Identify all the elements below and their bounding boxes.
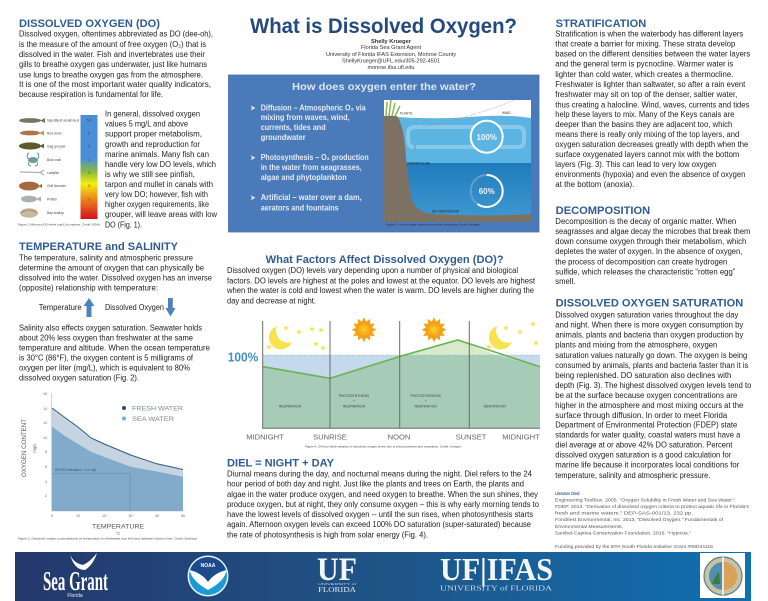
text block: salinity: temperature and altitude. When the ocean temperature	[19, 344, 210, 353]
literature cited: Fondriest Environmental, Inc. 2013. "Dissolved Oxygen." Fundamentals of	[555, 517, 724, 522]
text block: general DO values: handle very low DO levels, which	[105, 160, 216, 169]
text block: salinity: Salinity also effects oxygen saturation. Seawater holds	[19, 324, 202, 333]
text block: stratification: freshwater may sit on top of the denser, saltier water,	[555, 90, 737, 99]
time axis labels: NOON	[388, 433, 410, 442]
x axis ticks: 50	[181, 514, 185, 518]
heading: diel: DIEL = NIGHT + DAY	[227, 458, 335, 470]
x axis title: °C	[116, 531, 120, 536]
literature cited	[555, 491, 750, 549]
area: sea water	[52, 427, 183, 511]
time axis labels: SUNSET	[456, 433, 487, 442]
y axis title: OXYGEN CONTENT	[21, 419, 28, 477]
author block	[326, 39, 456, 71]
x axis ticks	[51, 514, 185, 518]
text block: temperature intro	[19, 254, 212, 293]
caption: figure 3: Figure 3. Wet at water depths vary within an estuary. Credit: Krueger	[386, 222, 480, 226]
oxygen curve	[263, 340, 540, 378]
author block: ShellyKrueger@UFL.edu/305-292-4501	[342, 58, 440, 64]
text block: saturation: temperature, salinity and atmospheric pressure.	[555, 471, 710, 480]
inverse relationship arrows: Dissolved Oxygen	[105, 303, 164, 312]
bullet list	[250, 104, 369, 212]
text block: stratification: means there is really only mixing of the top layers, and	[555, 130, 739, 139]
bullet: photosynthesis	[250, 153, 369, 182]
text block: dissolved oxygen definition	[19, 29, 213, 99]
text block: stratification: environments (hypoxia) and even the absence of oxygen	[555, 170, 745, 179]
text block: saturation: animals, plants and bacteria than oxygen production by	[555, 330, 743, 339]
area: oxygen level	[263, 340, 540, 428]
y axis ticks: 12	[43, 421, 47, 425]
author block: Shelly Krueger	[371, 39, 412, 45]
logo: UF IFAS: UF|IFAS	[440, 551, 553, 587]
literature cited: Engineering ToolBox. 2005. "Oxygen Solubility in Fresh Water and Sea Water."	[555, 498, 735, 502]
text block: saturation: plants and mixing from the atmosphere, oxygen	[555, 340, 717, 349]
chart: species oxygen requirements: 5	[88, 132, 90, 136]
chart: species oxygen requirements: 2	[88, 198, 90, 202]
text block: stratification: Stratification is when the waterbody has different layers	[555, 30, 743, 39]
legend	[122, 405, 183, 423]
text block: saturation: saturation values naturally go down. The oxygen is being	[555, 351, 747, 360]
phase labels: +	[425, 399, 427, 403]
text block: decomposition: smell.	[555, 277, 575, 286]
x axis title: TEMPERATURE	[92, 524, 144, 530]
text block: saturation	[555, 310, 752, 480]
panel: how does oxygen enter the water	[228, 75, 539, 232]
y axis ticks: 6	[45, 465, 47, 469]
text block: stratification: based on the different densities between the water layers	[555, 50, 750, 59]
text block: temperature intro: determine the amount of oxygen that can physically be	[19, 264, 204, 273]
arrow: temperature up	[84, 298, 94, 317]
chart: species oxygen requirements: 1	[88, 211, 90, 215]
panel: stratification	[555, 18, 750, 189]
chart: species oxygen requirements: 5-6	[87, 118, 92, 122]
phase labels: RESPIRATION	[415, 404, 437, 408]
text block: dissolved oxygen definition: gills to breathe oxygen gas underwater, just like humans	[19, 60, 207, 69]
author block: University of Florida IFAS Extension, Monroe County	[326, 52, 456, 58]
text block: general DO values: is why we still see pinfish,	[105, 170, 195, 179]
panel: diel	[227, 458, 540, 539]
text block: stratification: that create a barrier for mixing. These strata develop	[555, 40, 736, 49]
author block: monroe.ifas.ufl.edu	[368, 65, 414, 71]
text block: stratification: at the bottom (anoxia).	[555, 180, 634, 189]
footer band	[15, 551, 751, 601]
heading: dissolved oxygen: DISSOLVED OXYGEN (DO)	[19, 18, 160, 30]
text block: decomposition: seagrasses and algae decay the microbes that break them	[555, 227, 750, 236]
60 percent gauge: 60%	[479, 187, 495, 196]
phase labels: PHOTOSYNTHESIS	[411, 394, 442, 398]
text block: diel: the rate of photosynthesis is high from solar energy (Fig. 4).	[227, 530, 428, 539]
bullet: diffusion: Diffusion – Atmospheric O₂ via	[261, 104, 366, 113]
y axis title	[21, 419, 37, 477]
logo: Sea Grant Florida: Sea Grant	[43, 566, 108, 596]
text block: general DO values: values 5 mg/L and above	[105, 120, 188, 129]
logo: UF University of Florida: FLORIDA	[318, 586, 356, 594]
area: oversaturation	[400, 340, 497, 355]
text block: salinity: dissolved oxygen saturation (Fig. 2).	[19, 374, 139, 383]
upper water layer	[384, 116, 531, 164]
text block: stratification: oxygen saturation decreases greatly with depth when the	[555, 140, 748, 149]
text block: temperature intro: (opposite) relationship with temperature:	[19, 284, 158, 293]
y axis ticks: 10	[43, 436, 47, 440]
text block: factors	[226, 266, 536, 305]
text block: diel	[227, 470, 540, 539]
bullet: artificial: Artificial – water over a dam,	[261, 193, 362, 202]
100 percent label: 100%	[228, 350, 259, 364]
species labels	[47, 118, 79, 215]
text block: diel: hour period of both day and night. Just like the plants and trees on Earth, the plants and	[227, 480, 524, 489]
text block: decomposition: depletes the water of oxygen. In the absence of oxygen,	[555, 247, 742, 256]
diagram labels: DECOMPOSITION	[432, 210, 460, 214]
bullet: diffusion	[250, 104, 366, 142]
phase labels: +	[353, 399, 355, 403]
100 percent gauge	[471, 121, 503, 153]
panel heading: How does oxygen enter the water?	[292, 81, 476, 93]
x axis title	[92, 524, 144, 536]
text block: stratification: surface oxygenated layers cannot mix with the bottom	[555, 150, 739, 159]
text block: dissolved oxygen definition: is the measure of the amount of free oxygen (O₂) that is	[19, 40, 206, 49]
literature cited: fresh and marine waters." DEP-SAS-001/13, 232 pp.	[555, 510, 693, 516]
text block: saturation: higher in the atmosphere and most mixing occurs at the	[555, 401, 743, 410]
text block: salinity: about 20% less oxygen than freshwater at the same	[19, 334, 193, 343]
caption: figure 2: Figure 2. Dissolved oxygen concentrations vs temperature for freshwater (top line) and saltwater (bottom line). Credit: Sorbitool	[18, 536, 197, 540]
literature cited: Literature Cited:	[555, 491, 580, 496]
chart: species oxygen requirements: 3	[88, 184, 90, 188]
text block: diel: produce oxygen, but at night, they only consume oxygen – this is why early morning tends to	[227, 500, 540, 509]
icon: sun noon	[422, 317, 446, 342]
diagram: water column layers	[384, 100, 531, 226]
y axis ticks: 4	[45, 480, 47, 484]
text block: stratification: thus creating a halocline. Wind, waves, currents and tides	[555, 100, 749, 109]
bullet: photosynthesis: in the water from seagrasses,	[261, 163, 362, 172]
species labels: Bay scallop	[47, 211, 64, 215]
logo: UF University of Florida: UNIVERSITY of	[318, 582, 356, 586]
chart: oxygen content vs temperature	[18, 392, 197, 540]
caption: figure 4: Figure 4. 24-hour (diel) variation in dissolved oxygen levels due to photosynthesis and respiration. Credit: Krueger	[305, 444, 461, 448]
y axis ticks: 16	[43, 392, 47, 396]
axes and time dividers	[263, 321, 540, 428]
text block: saturation: standards for water quality, coastal waters must have a	[555, 430, 741, 439]
caption: figure 1: Figure 1. Minimum DO levels (mg/L) by species. Credit: NOAA	[18, 222, 100, 226]
text block: factors: day and decrease at night.	[227, 296, 316, 305]
y axis ticks: 2	[45, 494, 47, 498]
text block: saturation: Dissolved oxygen saturation varies throughout the day	[555, 310, 738, 319]
text block: saturation: be at the surface because oxygen concentrations are	[555, 391, 737, 400]
author block: Florida Sea Grant Agent	[361, 45, 421, 51]
text block: decomposition: the process of decomposition can create hydrogen	[555, 257, 727, 266]
bullet: diffusion: currents, tides and	[261, 123, 326, 132]
text block: saturation: surface through diffusion. In order to meet Florida	[555, 411, 728, 420]
panel: dissolved oxygen saturation	[555, 298, 752, 480]
text block: saturation: being replenished. DO saturation also declines with	[555, 371, 731, 380]
text block: general DO values: marine animals. Many fish can	[105, 150, 209, 159]
text block: saturation: depth (Fig. 3). The highest dissolved oxygen levels tend to	[555, 381, 752, 390]
text block: diel: algae in the water produce oxygen, and need oxygen to breathe. When the sun shines, they	[227, 490, 538, 499]
panel: decomposition	[555, 205, 750, 286]
text block: diel: have the lowest levels of dissolved oxygen -- until the sun rises, when photosynthesis starts	[227, 510, 533, 519]
legend: FRESH WATER	[132, 405, 183, 412]
text block: diel: Diurnal means during the day, and nocturnal means during the night. Diel refers to the 24	[227, 470, 533, 479]
icons: fish and shellfish	[19, 118, 45, 218]
chart: species oxygen requirements	[18, 115, 100, 226]
bullet: artificial	[250, 193, 362, 212]
diagram labels: PLANTS	[400, 112, 412, 116]
heading: saturation: DISSOLVED OXYGEN SATURATION	[556, 298, 743, 310]
chart: species oxygen requirements: 4	[88, 158, 90, 162]
chart: species oxygen requirements: 5	[88, 144, 90, 148]
icon: night left	[266, 325, 326, 350]
literature cited: Funding provided by the EPA South Florida Initiative Grant #00D41115	[555, 544, 713, 549]
sediment and bank	[384, 116, 531, 222]
text block: saturation: diel average at or above 42% DO saturation. Percent	[555, 440, 733, 449]
heading: temperature and salinity: TEMPERATURE and SALINITY	[19, 241, 179, 253]
100 percent gauge: 100%	[476, 133, 497, 142]
arrow: oxygen down	[166, 298, 176, 316]
time axis labels: MIDNIGHT	[502, 433, 540, 442]
text block: saturation: marine life because it incorporates local conditions for	[555, 460, 740, 469]
text block: decomposition: down consume oxygen through their metabolism, which	[555, 237, 746, 246]
panel: temperature and salinity	[18, 241, 212, 540]
phase labels	[279, 394, 506, 408]
y axis ticks: 8	[45, 450, 47, 454]
x axis ticks: 10	[76, 514, 80, 518]
heading: what factors affect DO: What Factors Affect Dissolved Oxygen (DO)?	[266, 254, 504, 266]
text block: general DO values: very low DO; however, fish with	[105, 190, 208, 199]
plants	[386, 100, 400, 116]
text block: dissolved oxygen definition: use lungs to breathe oxygen gas from the atmosphere.	[19, 70, 203, 79]
phase labels: RESPIRATION	[279, 404, 302, 408]
text block: dissolved oxygen definition: dissolved in the water. Fish and invertebrates use their	[19, 50, 205, 59]
x axis ticks: 20	[102, 514, 106, 518]
literature cited: Environmental Measurements.	[555, 524, 623, 529]
text block: stratification: and the general term is pycnocline. Warmer water is	[555, 60, 733, 69]
time axis labels	[246, 433, 540, 442]
text block: salinity: is 30°C (86°F), the oxygen content is 5 milligrams of	[19, 354, 194, 363]
literature cited: Sanibel-Captiva Conservation Foundation. 2016. "Hypoxia."	[555, 530, 691, 536]
text block: saturation: consumed by animals, plants and bacteria faster than it is	[555, 361, 748, 370]
text block: salinity	[19, 324, 210, 383]
inverse relationship arrows: Temperature	[39, 303, 82, 312]
logo: county seal	[700, 553, 745, 598]
icon: night right	[486, 321, 539, 350]
species labels: Ladyfish	[47, 171, 59, 175]
bullet: artificial: aerators and fountains	[261, 203, 339, 212]
area: fresh water	[52, 408, 183, 511]
text block: general DO values: growth and reproduction for	[105, 140, 200, 149]
text block: general DO values: tarpon and mullet in canals with	[105, 180, 213, 189]
x axis ticks: 0	[51, 514, 53, 518]
y axis ticks	[43, 392, 47, 498]
logo: UF University of Florida: UF	[317, 552, 357, 588]
diagram labels: WIND	[502, 111, 511, 115]
mixing arrows	[408, 127, 524, 147]
text block: general DO values: higher oxygen requirements, like	[105, 200, 209, 209]
text block: salinity: oxygen per liter (mg/L), which is equivalent to 80%	[19, 364, 190, 373]
panel: dissolved oxygen intro	[18, 18, 217, 229]
colour scale bar	[80, 115, 98, 219]
text block: general DO values: DO (Fig. 1).	[105, 220, 142, 229]
band: below saturation	[263, 355, 540, 428]
y axis title: mg/L	[32, 443, 37, 453]
species labels: Gag grouper	[47, 144, 66, 148]
time axis labels: SUNRISE	[313, 433, 347, 442]
text block: dissolved oxygen definition: Dissolved oxygen, oftentimes abbreviated as DO (dee-oh),	[19, 29, 213, 38]
text block: stratification: Freshwater is lighter than saltwater, so after a rain event	[555, 80, 746, 89]
text block: decomposition: Decomposition is the decay of organic matter. When	[555, 217, 736, 226]
x axis ticks: 40	[155, 514, 159, 518]
text block: stratification	[555, 30, 750, 189]
saturation label: 80% DO Saturation = 5.0 mg/L	[55, 468, 97, 472]
text block: dissolved oxygen definition: because respiration is fundamental for life.	[19, 90, 163, 99]
text block: saturation: Department of Environmental Protection (FDEP) state	[555, 420, 737, 429]
title: What is Dissolved Oxygen?	[250, 15, 517, 38]
text block: temperature intro: dissolved into the water. Dissolved oxygen has an inverse	[19, 274, 212, 283]
heading: stratification: STRATIFICATION	[556, 18, 646, 30]
logo: UF IFAS: UNIVERSITY of FLORIDA	[440, 584, 553, 592]
y axis ticks: 14	[43, 407, 47, 411]
chart: diel oxygen cycle	[228, 317, 540, 448]
species labels: Gulf flounder	[47, 184, 67, 188]
text block: general DO values	[105, 109, 217, 229]
60 percent gauge	[471, 175, 503, 207]
text block: temperature intro: The temperature, salinity and atmospheric pressure	[19, 254, 193, 263]
bullet: photosynthesis: Photosynthesis – O₂ production	[261, 153, 369, 162]
logo: NOAA	[188, 556, 228, 596]
phase labels: RESPIRATION	[343, 404, 366, 408]
chart: species oxygen requirements: 3	[88, 171, 90, 175]
phase labels: RESPIRATION	[484, 404, 506, 408]
logo: NOAA: NOAA	[201, 563, 216, 569]
text block: decomposition: sulfide, which releases the characteristic “rotten egg”	[555, 267, 736, 276]
diagram labels	[400, 111, 511, 214]
text block: diel: again. Afternoon oxygen levels can exceed 100% DO saturation (super-saturated) because	[227, 520, 531, 529]
icon: sun sunrise	[352, 317, 376, 342]
species labels: Pinfish	[47, 198, 57, 202]
heading: decomposition: DECOMPOSITION	[556, 205, 650, 217]
logo: Sea Grant Florida	[43, 553, 108, 599]
bullet: photosynthesis: algae and phytoplankton	[261, 173, 347, 182]
text block: factors: Dissolved oxygen (DO) levels vary depending upon a number of physical and biological	[227, 266, 518, 275]
text block: stratification: layers (Fig. 3). This can lead to very low oxygen	[555, 160, 716, 169]
wind line	[423, 100, 515, 127]
text block: stratification: help these layers to mix. Many of the Keys canals are	[555, 110, 734, 119]
text block: factors: factors. DO levels are highest at the poles and lowest at the equator. DO levels are highest	[227, 276, 536, 285]
lower water layer	[384, 163, 531, 217]
logo: Sea Grant Florida: Florida	[67, 593, 83, 599]
text block: saturation: dissolved oxygen saturation is a good calculation for	[555, 450, 732, 459]
literature cited: FDEP. 2013. "Derivation of dissolved oxygen criteria to protect aquatic life in Florida's	[555, 504, 750, 509]
100 percent line	[263, 354, 540, 356]
text block: general DO values: grouper, will leave areas with low	[105, 210, 217, 219]
x axis ticks: 30	[128, 514, 132, 518]
text block: stratification: deeper than the basins they are adjacent too, which	[555, 120, 732, 129]
diagram labels: THERMOCLINE	[407, 162, 430, 166]
text block: general DO values: In general, dissolved oxygen	[105, 109, 200, 118]
phase labels: PHOTOSYNTHESIS	[339, 394, 370, 398]
legend: SEA WATER	[132, 416, 174, 423]
time axis labels: MIDNIGHT	[246, 433, 284, 442]
text block: stratification: lighter than cold water, which creates a thermocline.	[555, 70, 733, 79]
species labels: Blue crab	[47, 158, 61, 162]
inverse relationship arrows	[39, 298, 176, 317]
text block: factors: when the water is cold and lowest when the water is warm. DO levels are higher during the	[226, 286, 534, 295]
bullet: diffusion: mixing from waves, wind,	[261, 113, 350, 122]
text block: saturation: and night. When there is more oxygen consumption by	[555, 320, 743, 329]
bullet: diffusion: groundwater	[261, 133, 306, 142]
text block: general DO values: support proper metabolism,	[105, 130, 202, 139]
text block: decomposition	[555, 217, 750, 286]
species labels: Spotted seatrout	[47, 118, 79, 122]
text block: dissolved oxygen definition: It is one of the most important water quality indicators,	[19, 80, 211, 89]
species labels: Red drum	[47, 132, 62, 136]
